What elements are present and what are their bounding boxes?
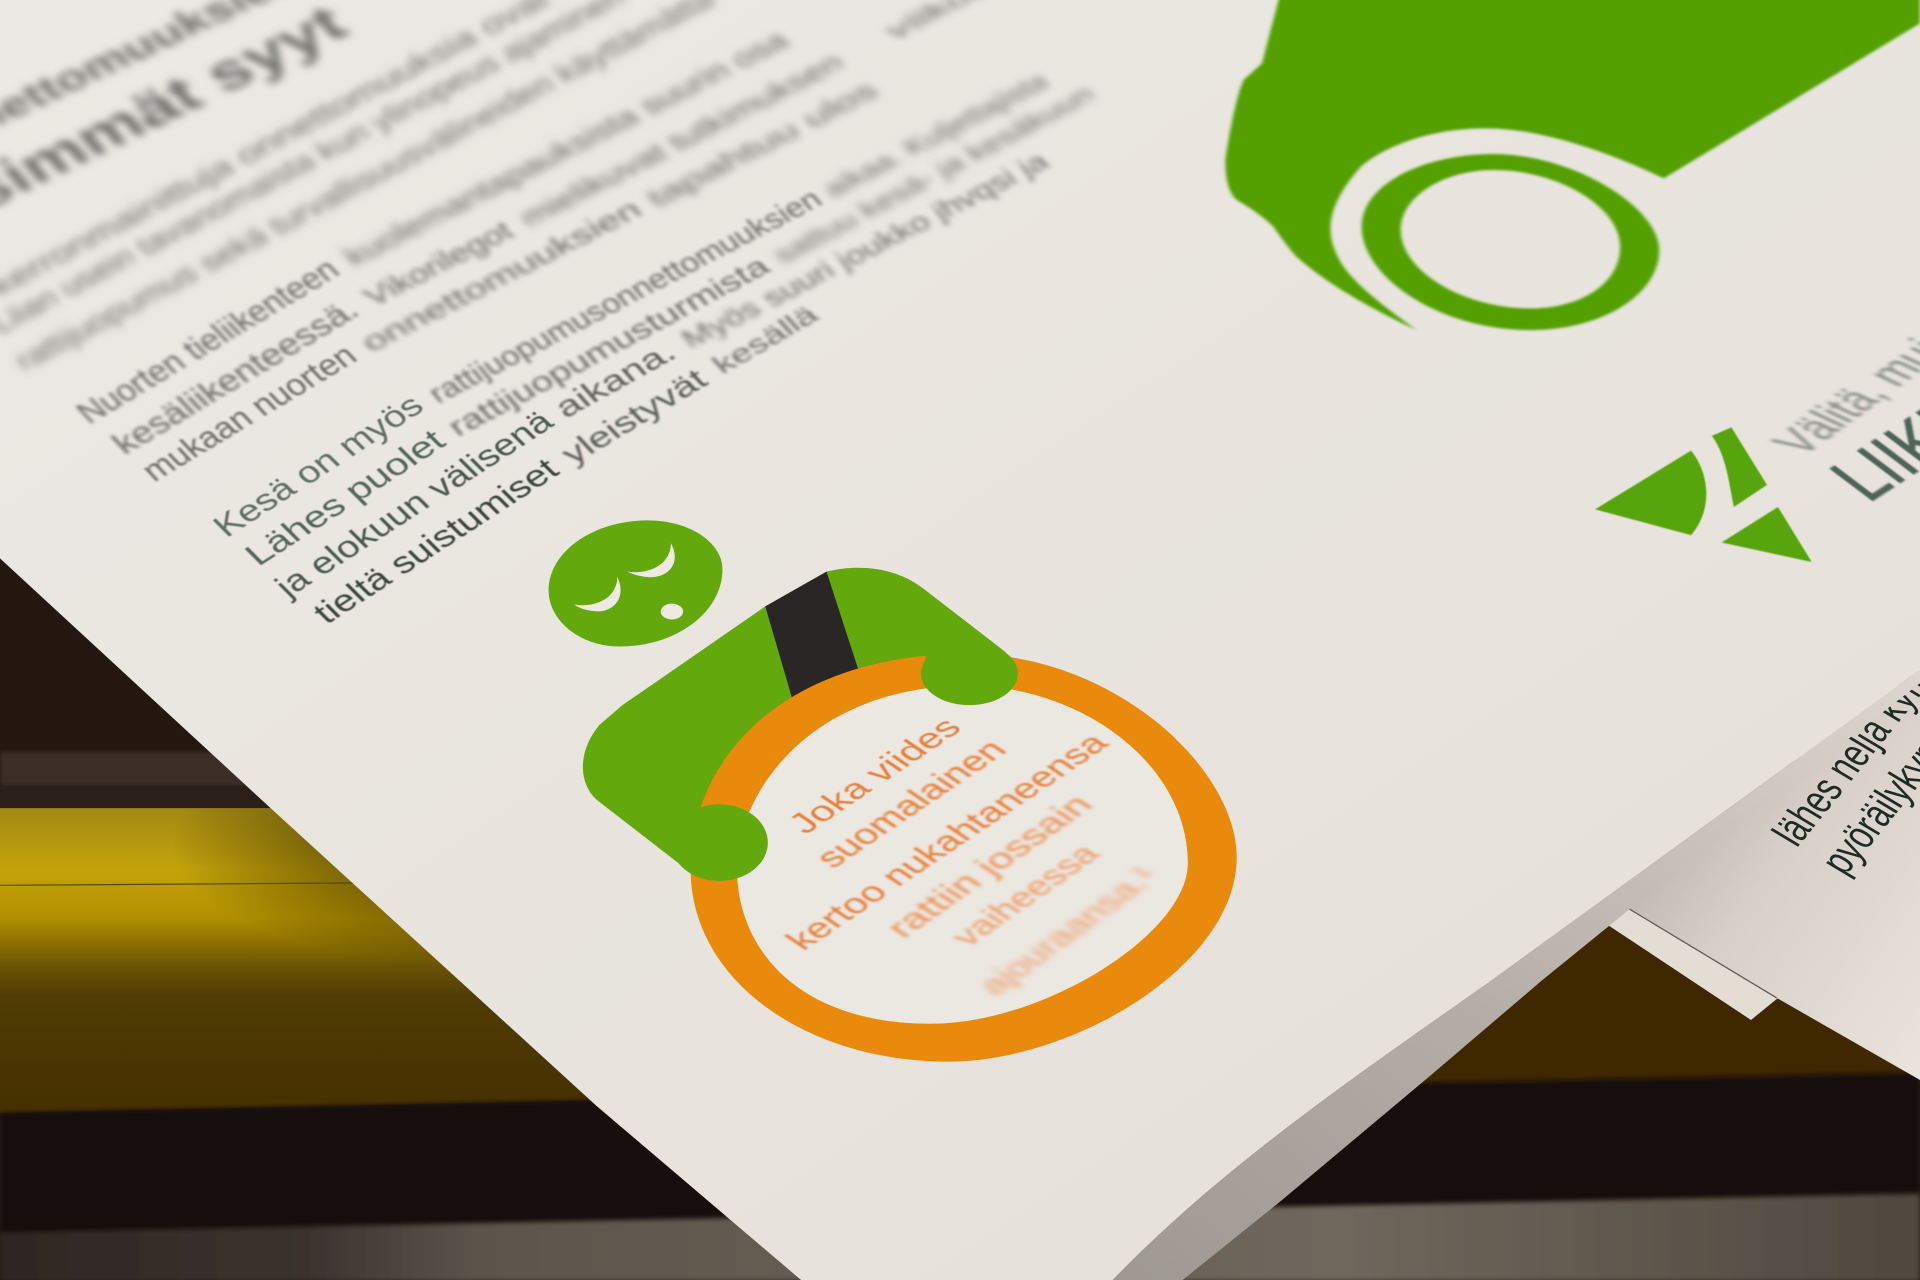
sheet text: mutta: [1710, 738, 1803, 826]
callout text inside wheel: [777, 712, 1167, 1001]
eye: [574, 577, 621, 611]
wheel interior: [737, 686, 1188, 1024]
seat belt: [765, 572, 870, 729]
torso: [583, 568, 1015, 879]
truck body: [1225, 0, 1920, 330]
paragraph two: mielikuvat tutkimuksen: [513, 47, 849, 232]
callout text inside wheel: Joka viides: [780, 712, 970, 840]
paragraph two: tapahtuu ulos: [640, 75, 884, 213]
hands: [671, 616, 1018, 881]
paragraph two: Nuorten tieliikenteen: [69, 252, 347, 431]
paragraph one: Liian usein tavanomaista kun ylinopeus ajaminen: [0, 0, 632, 340]
logo text: [1759, 214, 1920, 513]
paragraph three: Myös suuri joukko jhvqsi ja: [675, 145, 1055, 354]
paragraph three: Kesä on myös: [206, 388, 431, 544]
body text blurred heading and paragraphs: [0, 0, 1100, 631]
paragraph three: sattuu kesä- ja kesäkuun: [767, 79, 1100, 269]
paragraph three: ja elokuun välisenä: [267, 404, 561, 605]
logo: [1595, 214, 1920, 562]
lower sheets behind brochure: [1602, 563, 1920, 1080]
callout text inside wheel: rattiin jossain: [878, 789, 1101, 944]
paragraph two: onnettomuuksien: [355, 194, 648, 358]
paragraph two: Vikorilegot: [358, 215, 520, 313]
sheet: narrow strip: [1602, 900, 1778, 1020]
sheet text: [1710, 563, 1920, 882]
paragraph three: kesällä: [706, 299, 825, 379]
callout text inside wheel: suomalainen: [807, 734, 1015, 874]
icon: truck silhouette with wheel: [1225, 0, 1920, 330]
head with closed eyes: [549, 520, 722, 647]
eye: [628, 543, 675, 577]
logo mark: [1595, 427, 1812, 562]
paragraph two: [69, 0, 1018, 488]
callout text inside wheel: ajouraansa.¹: [970, 861, 1167, 1001]
paragraph three: rattijuopumusonnettomuuksien: [422, 183, 828, 410]
mouth: [661, 604, 683, 619]
paragraph three: aikaa. Kuljettajista: [817, 66, 1054, 203]
paragraph three: Lähes puolet: [238, 423, 454, 573]
sheet: text page: [1629, 649, 1920, 1080]
paragraph three: aikana.: [547, 335, 683, 424]
paragraph two: kesäliikenteessä.: [105, 292, 367, 461]
wheel ring: [1362, 154, 1659, 330]
paragraph two: kuolemantapauksista suurin osa: [338, 25, 795, 272]
paragraph three: yleistyvät: [554, 362, 715, 470]
steering wheel ring: [691, 654, 1237, 1062]
paragraph one: rattijuopumus sekä turvallisuusvälineiden käyttämättä: [8, 0, 721, 376]
sleeping driver figure: [549, 520, 1237, 1062]
brochure fold edge: [1112, 670, 1920, 1280]
heading: [0, 0, 359, 273]
paragraph three: rattijuopumusturmista: [441, 250, 777, 443]
paragraph three: [206, 66, 1100, 631]
callout text inside wheel: kertoo nukahtaneensa: [777, 727, 1118, 956]
paragraph two: mukaan nuorten: [134, 338, 364, 488]
callout text inside wheel: vaiheessa: [943, 838, 1108, 952]
paragraph three: tieltä suistumiset: [306, 452, 567, 631]
